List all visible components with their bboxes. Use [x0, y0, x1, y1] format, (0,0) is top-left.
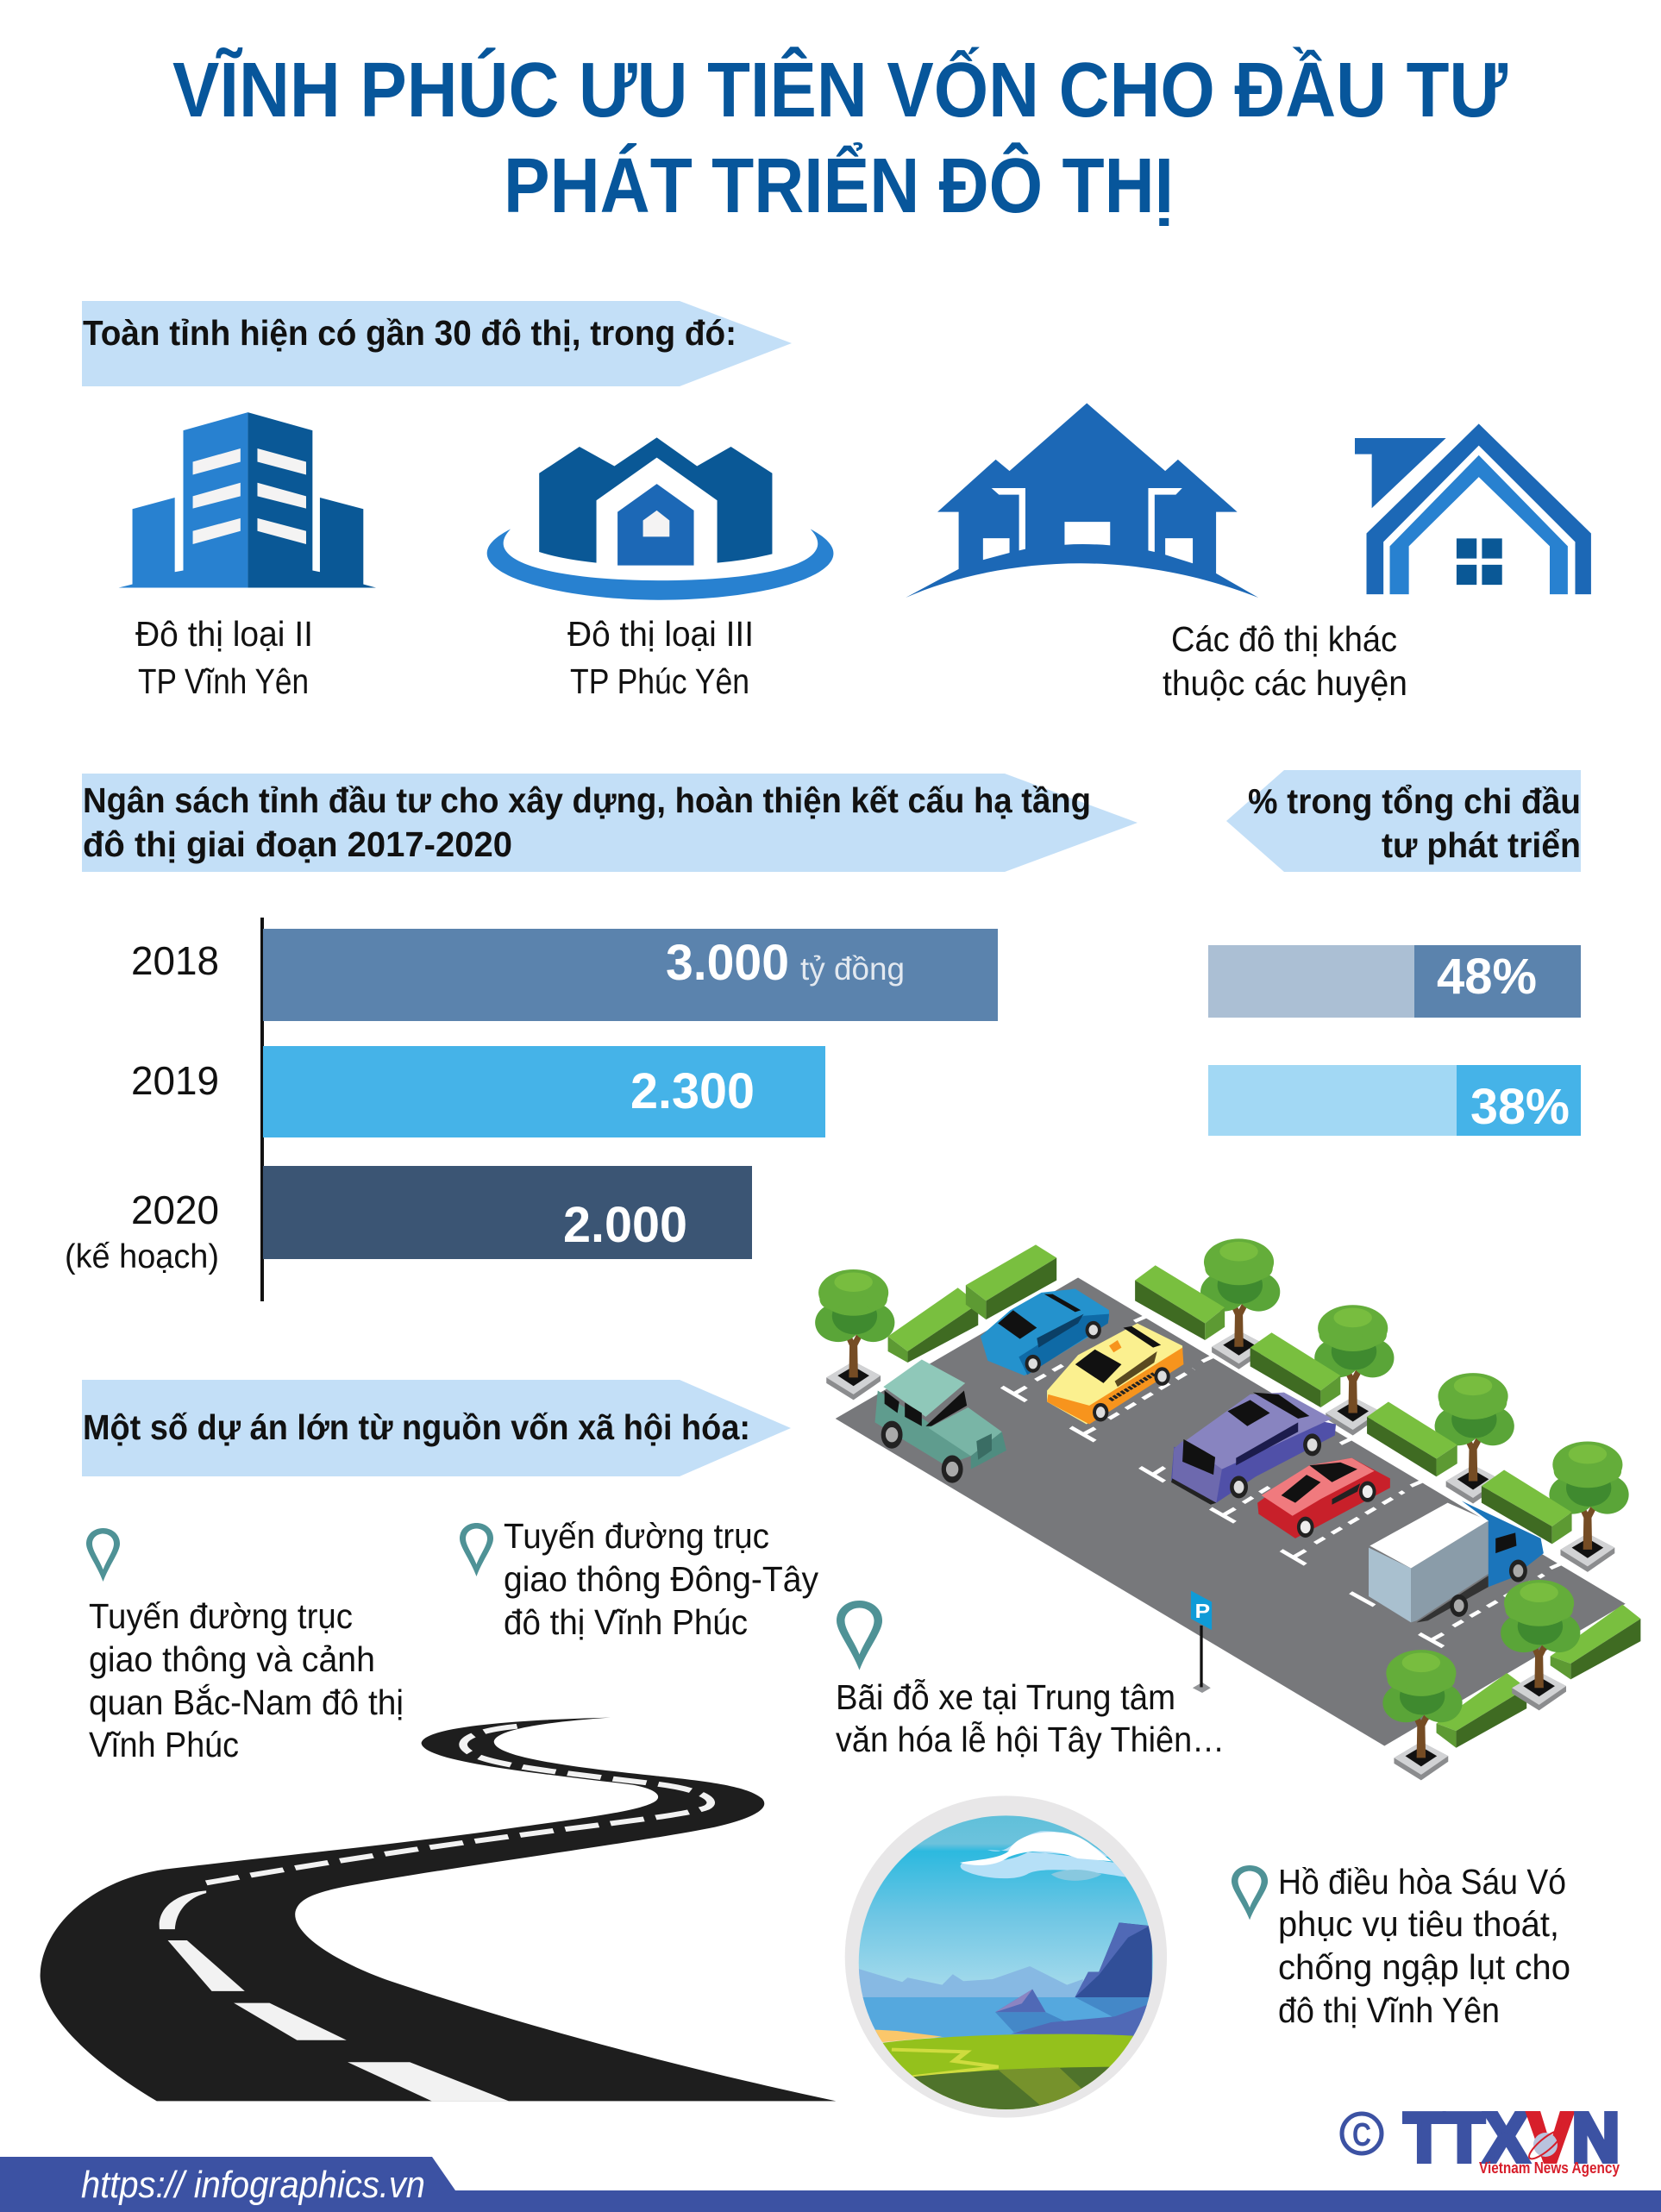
banner: provincial budget: đô thị giai đoạn 2017-2020: [83, 824, 512, 864]
year 2020: 2020: [131, 1187, 219, 1232]
banner: large projects: [82, 1380, 791, 1476]
banner: number of urban areas: Toàn tỉnh hiện có gần 30 đô thị, trong đó:: [83, 313, 736, 353]
car: blue sedan: [981, 1289, 1109, 1375]
banner: percent of development spending: % trong tổng chi đầu: [1248, 781, 1581, 821]
icon: house with chevron roof: [1355, 423, 1591, 594]
illustration: winding road: [41, 1718, 836, 2101]
trees and hedges: [815, 1238, 1629, 1572]
project pin 2: [460, 1523, 493, 1576]
project text: north-south axis: quan Bắc-Nam đô thị: [89, 1682, 404, 1722]
project text: east-west axis: [504, 1516, 818, 1642]
project text: regulating lake: chống ngập lụt cho: [1278, 1947, 1570, 1987]
value 2020: 2.000: [563, 1197, 687, 1253]
project text: east-west axis: Tuyến đường trục: [504, 1516, 769, 1556]
label: other urban areas: [1163, 619, 1407, 703]
project text: east-west axis: đô thị Vĩnh Phúc: [504, 1602, 748, 1642]
icon: large house on hill: [906, 404, 1258, 598]
car: green jeep: [875, 1360, 1006, 1483]
bar: 38 percent: [1208, 1065, 1581, 1136]
bar 2018: [263, 929, 998, 1021]
title: PHÁT TRIỂN ĐÔ THỊ: [504, 141, 1174, 229]
project text: north-south axis: [89, 1596, 404, 1764]
label: other urban areas: thuộc các huyện: [1163, 663, 1407, 703]
car: yellow taxi: [1047, 1323, 1183, 1425]
banner: provincial budget: [82, 774, 1138, 872]
project text: north-south axis: Vĩnh Phúc: [89, 1725, 239, 1764]
illustration: parking lot: [815, 1238, 1640, 1780]
icon: P sign: P: [1194, 1601, 1210, 1623]
project text: regulating lake: đô thị Vĩnh Yên: [1278, 1990, 1500, 2030]
parking markings: [1002, 1317, 1562, 1647]
project pin 4: [1232, 1865, 1268, 1920]
label: city class III: Đô thị loại III: [567, 614, 754, 654]
label: city class II: [135, 614, 313, 701]
logo: copyright mark: C: [1352, 2117, 1371, 2153]
bar: 38 percent: 38%: [1470, 1079, 1570, 1135]
banner: percent of development spending: tư phát triển: [1382, 825, 1581, 865]
footer bar: [0, 2157, 1661, 2212]
title: VĨNH PHÚC ƯU TIÊN VỐN CHO ĐẦU TƯ: [172, 46, 1507, 134]
project text: east-west axis: giao thông Đông-Tây: [504, 1559, 818, 1599]
axis: [260, 918, 264, 1301]
project text: regulating lake: [1278, 1862, 1570, 2030]
logo: copyright mark: [1342, 2114, 1382, 2153]
value 2018: 3.000: [666, 935, 789, 991]
bar: 48 percent: [1208, 945, 1581, 1018]
label: city class III: TP Phúc Yên: [570, 661, 749, 701]
unit: tỷ đồng: [800, 951, 905, 987]
label: other urban areas: Các đô thị khác: [1171, 619, 1397, 659]
year 2018: 2018: [131, 938, 219, 983]
project text: parking lot: văn hóa lễ hội Tây Thiên…: [836, 1720, 1225, 1759]
car: red sports car: [1257, 1458, 1390, 1538]
icon: office tower: [119, 412, 376, 587]
project text: parking lot: [836, 1677, 1225, 1759]
vehicle: delivery truck: [1369, 1501, 1544, 1622]
logo: TTXVN: Vietnam News Agency: [1479, 2159, 1620, 2177]
title: [172, 46, 1507, 229]
icon: P sign: [1191, 1591, 1212, 1693]
footer bar: https:// infographics.vn: [81, 2164, 425, 2206]
project text: north-south axis: Tuyến đường trục: [89, 1596, 353, 1636]
icon: house on crescent: [487, 437, 833, 600]
project text: regulating lake: phục vụ tiêu thoát,: [1278, 1904, 1559, 1944]
banner: provincial budget: Ngân sách tỉnh đầu tư cho xây dựng, hoàn thiện kết cấu hạ tầng: [83, 780, 1091, 820]
project pin 3: [837, 1601, 882, 1670]
trees and hedges front: [1382, 1580, 1640, 1780]
bar 2019: [263, 1046, 825, 1137]
banner: percent of development spending: [1226, 770, 1581, 872]
plan note: (kế hoạch): [65, 1238, 219, 1275]
project text: regulating lake: Hồ điều hòa Sáu Vó: [1278, 1862, 1566, 1902]
project text: parking lot: Bãi đỗ xe tại Trung tâm: [836, 1677, 1175, 1717]
year 2019: 2019: [131, 1058, 219, 1103]
bar 2020: [263, 1166, 752, 1259]
asphalt: [836, 1278, 1626, 1746]
project pin 1: [86, 1528, 120, 1582]
bar chart: budget by year: [65, 918, 998, 1301]
label: city class II: Đô thị loại II: [135, 614, 313, 654]
banner: number of urban areas: [82, 301, 792, 386]
car: purple van: [1171, 1393, 1336, 1505]
label: city class II: TP Vĩnh Yên: [138, 661, 309, 701]
project text: north-south axis: giao thông và cảnh: [89, 1639, 375, 1679]
label: city class III: [567, 614, 754, 701]
logo: TTXVN: TTXVN: [1404, 2099, 1620, 2176]
illustration: lake scene in oval: [845, 1795, 1167, 2118]
value 2019: 2.300: [630, 1063, 755, 1119]
banner: large projects: Một số dự án lớn từ nguồn vốn xã hội hóa:: [83, 1407, 750, 1447]
bar: 48 percent: 48%: [1437, 949, 1537, 1005]
